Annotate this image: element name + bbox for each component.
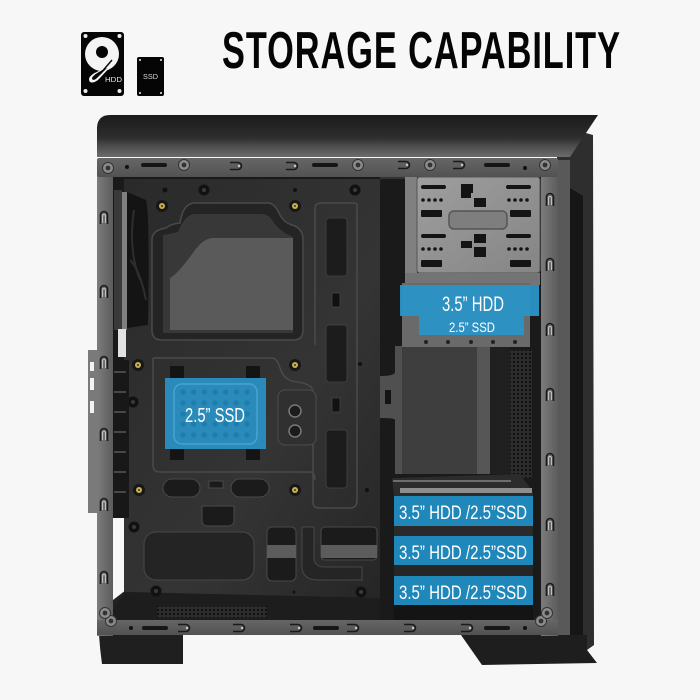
drive wall <box>380 177 541 477</box>
cage bays <box>394 496 533 620</box>
white fan tab <box>118 329 126 357</box>
label: cage bay 2: 3.5” HDD /2.5”SSD <box>399 543 527 564</box>
rail fittings <box>100 160 554 632</box>
SSD mount recess <box>170 366 260 460</box>
icon: SSD: SSD <box>143 74 158 81</box>
tray screws <box>128 184 369 598</box>
label: cage bay 3 <box>394 576 533 605</box>
label: 3.5 HDD: 3.5” HDD <box>442 293 504 316</box>
lower tray cut-outs <box>144 479 377 581</box>
label: 2.5 SSD on tray <box>165 378 266 449</box>
label: 3.5 HDD <box>400 285 539 316</box>
cage top <box>392 474 533 496</box>
icon: SSD <box>137 57 164 96</box>
top cap <box>97 115 598 157</box>
feet <box>99 635 597 665</box>
computer case <box>88 115 598 665</box>
tray rib <box>153 203 357 508</box>
label: cage bay 1: 3.5” HDD /2.5”SSD <box>399 503 527 524</box>
5.25 inch bay <box>417 177 540 273</box>
CPU cut-out <box>152 203 303 340</box>
drive bay under 5.25 <box>402 273 540 347</box>
side mesh <box>510 350 532 478</box>
icon: HDD: HDD <box>105 75 123 84</box>
square bracket with circles <box>278 390 316 445</box>
tray slots <box>326 218 347 488</box>
grey bands <box>267 545 377 558</box>
interior base <box>113 177 541 621</box>
icon: HDD <box>81 32 124 96</box>
label: cage bay 2 <box>394 536 533 565</box>
label: cage bay 3: 3.5” HDD /2.5”SSD <box>399 583 527 604</box>
label: 2.5 SSD in bay <box>419 316 524 335</box>
5.25 rail <box>405 177 417 342</box>
frame rails <box>97 158 558 636</box>
label: 2.5 SSD in bay: 2.5” SSD <box>449 319 495 335</box>
motherboard tray <box>113 179 380 621</box>
white gap <box>113 518 126 600</box>
tray side bracket <box>380 346 402 474</box>
label: 2.5 SSD on tray: 2.5” SSD <box>185 405 245 427</box>
right compartment <box>380 177 541 620</box>
front panel <box>557 130 594 650</box>
bottom vent <box>157 606 267 618</box>
title: STORAGE CAPABILITY <box>222 22 620 80</box>
label: cage bay 1 <box>394 496 533 526</box>
fan <box>114 190 149 330</box>
expansion slots <box>88 350 129 518</box>
